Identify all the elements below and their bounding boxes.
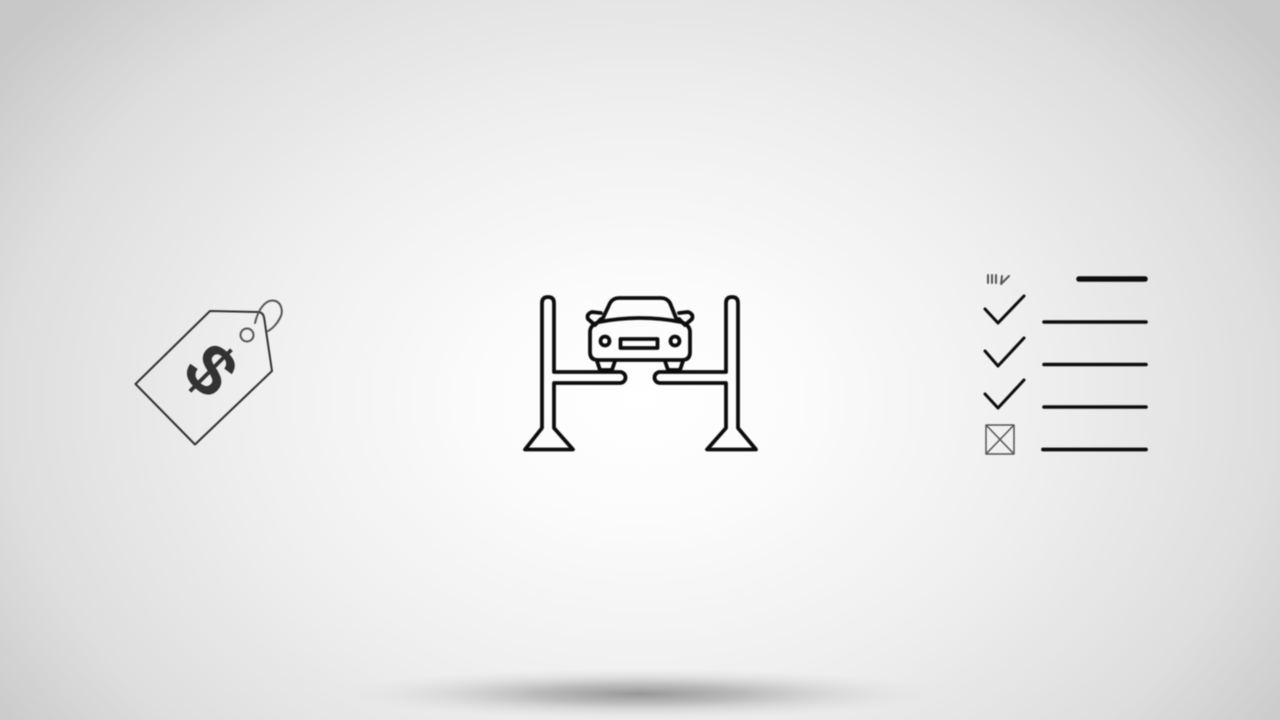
crossed box xyxy=(986,425,1014,454)
check mark 2 xyxy=(985,338,1024,366)
tag hole xyxy=(240,328,254,342)
left headlight xyxy=(600,336,610,346)
left lift post xyxy=(525,297,626,450)
icon: price tag xyxy=(136,300,282,444)
car xyxy=(588,298,692,370)
right wheel xyxy=(665,361,683,370)
ground shadow xyxy=(340,668,940,720)
icon: checklist xyxy=(985,275,1146,454)
first item line xyxy=(1079,276,1145,282)
left mirror xyxy=(588,312,601,325)
check mark 1 xyxy=(985,296,1024,323)
partly drawn first item mark xyxy=(988,275,1009,284)
item line 2 xyxy=(1044,363,1146,366)
item line 1 xyxy=(1044,320,1146,324)
item line 4 xyxy=(1043,448,1146,451)
check mark 3 xyxy=(985,380,1024,408)
item line 3 xyxy=(1044,405,1146,409)
tag outline xyxy=(136,311,272,444)
right headlight xyxy=(670,336,680,346)
left wheel xyxy=(597,361,615,370)
car roof xyxy=(603,298,676,318)
tag string loop xyxy=(255,300,282,331)
dollar sign: $ xyxy=(168,328,253,413)
right lift post xyxy=(654,297,756,450)
right mirror xyxy=(679,312,692,325)
car body xyxy=(590,318,690,360)
icon: car on lift xyxy=(525,297,756,450)
grille xyxy=(620,339,658,348)
